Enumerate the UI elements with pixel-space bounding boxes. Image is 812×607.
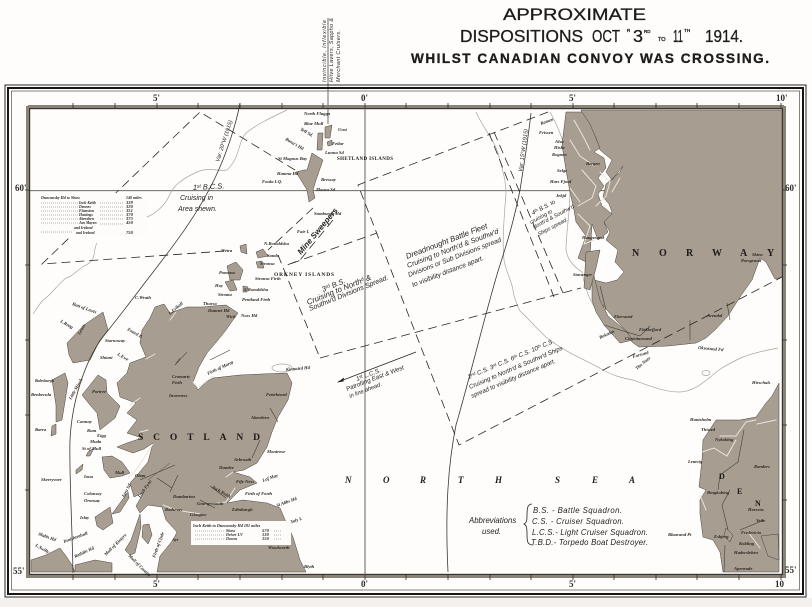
distance table: Duncansby Head: Duncansby Hd to Shaw [40,195,80,200]
place names: Shetland and Orkney: Fair I. [297,229,310,234]
place names: Scotland: Loch Fyne [136,479,153,499]
abbreviations legend: used. [482,527,501,536]
place names: Scotland: St Abbs Hd [276,496,298,508]
place names: Norway: Porsgrund [741,258,762,263]
place names: Norway: Bokadas [597,328,615,340]
title: OCT [592,26,620,46]
distance table: Inch Keith: Shaw [226,528,235,533]
place names: Shetland and Orkney: Hoy [214,283,224,288]
Lewis and Outer Hebrides [67,312,108,363]
degree labels [13,93,797,589]
place names: Scotland: Benbecula [30,392,52,397]
place names: Norway: Jekjd [555,193,567,198]
place names: Scotland: Little Minch [67,377,84,401]
place names: Scotland: Blyth [303,564,315,569]
land: Denmark [699,383,779,572]
depth contours [33,110,778,392]
patrol area: 3rd B.S.: 3 [320,284,328,294]
place names: Shetland and Orkney: Fetlar [332,141,344,146]
place names: Shetland and Orkney: Stronsa [260,261,275,266]
place names: Scotland [30,295,315,578]
place names: Shetland and Orkney: Bressay [320,177,337,182]
distance table: Duncansby Head: Jan Mayen [79,221,97,225]
Kintyre and Arran [125,514,141,555]
place names: Norway: Ekersund [613,314,633,319]
Mull [102,456,130,478]
degree labels: 55' [13,566,25,576]
map labels: countries and sea: N [344,475,352,485]
distance table: Duncansby Head: 750 [126,230,134,235]
patrol area: 3rd B.S. [278,255,390,358]
distance table: Duncansby Head: and Ireland [74,226,93,230]
patrol area: mine sweepers [268,206,377,265]
place names: Scotland: Firth [172,380,182,385]
place names: Scotland: Firth of Moray [206,359,235,376]
place names: Scotland: Malin Hd [37,531,57,543]
place names: Scotland: Islay [79,515,90,520]
place names: Scotland: Firth of Forth [245,491,273,496]
title: 1914. [705,26,743,46]
patrol area: 4th B.S.: B.S. to [537,199,557,214]
place names: Denmark: Ringkobing [707,490,730,495]
patrol: cruiser squadrons: th [536,343,542,349]
place names: Scotland: Lewis [76,323,86,336]
place names: Scotland: Fife Ness [236,479,254,484]
map labels: countries and sea: ORKNEY ISLANDS [274,272,334,278]
place names: Scotland: Montrose [266,449,285,454]
land: Scotland [31,304,306,572]
place names: Scotland: Cromarty [172,374,191,379]
place names: Scotland: Glasgow [190,512,207,517]
distance table: Duncansby Head [40,193,147,236]
place names: Denmark: Randers [754,464,770,469]
patrol: cruiser squadrons: th [513,353,518,359]
map labels: countries and sea: E [591,475,598,485]
degree labels: 5' [153,579,160,589]
patrol: cruiser squadrons: C.S. 10 [516,345,540,360]
place names: Shetland and Orkney: Lunna Sd [324,150,344,155]
degree labels: 5' [569,93,576,103]
map labels: countries and sea: O [383,475,390,485]
place names: Scotland: Mull of Kintyre [102,532,127,557]
patrol area: 4th B.S.: cruising to [529,209,554,226]
vertical annotation: outlying forces: Hiive Lavers, Sappho & [329,18,335,82]
place names: Scotland: Balesburgh [34,378,55,383]
place names: Scotland: Barra [34,427,47,432]
place names: Shetland and Orkney: Mousa Sd [315,187,336,192]
distance table: Duncansby Head: 370 [125,212,134,217]
abbreviations legend: B.S. - Battle Squadron. [533,506,622,515]
patrol area: Dreadnought Battle Fleet [320,112,782,445]
place names: Norway: Alsu [554,139,564,144]
place names: Shetland and Orkney: Noss Hd [240,313,258,318]
distance table: Duncansby Head: Hastings [78,213,93,217]
place names: Scotland: C.Wrath [135,295,151,300]
title: R [627,28,631,33]
patrol area: Dreadnought Battle Fleet: Divisions or Sub Divisions spread [407,237,503,279]
place names: Shetland and Orkney: Pomona [219,270,236,275]
place names: Shetland and Orkney: Wick [226,314,236,319]
place names: Scotland: Rothesay [165,507,183,512]
degree labels: 10 [775,579,784,589]
patrol: cruiser squadrons: C.S. 6 [495,355,516,369]
map labels: countries and sea: W [712,248,722,259]
patrol: 1st L.C.S. with arrow: in line ahead. [349,382,383,400]
patrol: 1st L.C.S. with arrow: 1 [355,375,361,383]
place names: Norway: Ramen [540,116,554,126]
patrol area: Dreadnought Battle Fleet: Dreadnought Battle Fleet [404,221,489,261]
Skye [82,375,120,430]
place names: Shetland and Orkney: North Flugga [303,111,331,116]
place names: Norway: Selge [557,168,567,173]
vertical annotation: outlying forces: Invincible, Inflexible [322,20,328,82]
place names: Scotland: Aberdeen [250,415,270,420]
patrol: cruiser squadrons: 2 [467,373,473,381]
place names: Denmark: Veile [756,518,765,523]
land: Shetland and Orkney [225,125,332,292]
abbreviations legend: C.S. - Cruiser Squadron. [532,517,624,526]
variation line 15 W: Var: 15°W (1915) [518,129,530,172]
place names: Denmark: Hantsholm [689,417,712,422]
variation line 20 W [70,103,240,573]
place names: Norway: Hiske [553,145,565,150]
patrol area: 3rd B.S.: Cruising to North [305,277,363,307]
place names: Shetland and Orkney: S.Ronaldsha [244,287,269,292]
place names: Shetland and Orkney: Sanda [267,253,280,258]
patrol area: 3rd B.S.: & [362,273,372,284]
map labels: countries and sea: R [686,248,694,259]
patrol area: 4th B.S.: Ships spread. [537,217,569,238]
place names: Scotland: Iona [83,474,94,479]
map labels: countries and sea: SCOTLAND [138,433,260,443]
title: 11 [673,26,683,46]
place names: Scotland: Dumbarton [172,494,195,499]
place names: Shetland and Orkney: Unst [338,127,348,132]
place names: Norway: The Naze [634,355,651,371]
place names: Scotland: Fetteheard [266,392,287,397]
place names: Shetland and Orkney: Dunnet Hd [207,308,230,313]
distance table: Inch Keith: 150 [262,536,270,541]
distance table: Inch Keith: 570 [262,528,270,533]
place names: Norway: Arendal [706,313,723,318]
title: DISPOSITIONS [460,26,583,46]
degree labels: 60' [785,183,797,193]
place names: Scotland: Oban [135,473,146,478]
place names: Scotland: Mull of Cantire [127,552,152,578]
place names: Norway: Forsund [632,350,650,359]
Islay and Jura [95,507,113,530]
place names: Shetland and Orkney: Yell Sd. [300,127,314,138]
place names: Shetland and Orkney: Pentland Firth [242,297,271,302]
patrol area: Dreadnought Battle Fleet: to visibility distance apart. [411,255,485,289]
place names: Norway: Rognen [552,152,567,157]
place names: Scotland: Eigg [96,433,107,438]
place names: Scotland: Portree [92,389,106,394]
place names: Denmark [667,380,771,571]
place names: Shetland and Orkney [203,111,348,319]
place names: Denmark: Fredericia [741,530,762,535]
distance table: Duncansby Head: Flamston [79,209,94,213]
distance table: Duncansby Head: 375 [125,216,134,221]
degree labels: 10' [776,93,788,103]
patrol: 1st L.C.S. with arrow: st [358,373,364,379]
place names: Shetland and Orkney: Blue Mull [303,121,324,126]
place names: Scotland: St of Mull [82,446,102,451]
abbreviations legend: T.B.D.- Torpedo Boat Destroyer. [531,538,648,547]
land: Norway [562,110,782,347]
map labels: countries and sea: S [555,475,560,485]
patrol area: 4th B.S.: th [533,207,539,213]
patrol: 1st L.C.S. with arrow [337,352,416,400]
place names: Norway [539,116,763,371]
map labels: countries and sea: D [719,472,725,481]
title: RD [644,29,651,34]
map labels: countries and sea: R [419,475,426,485]
place names: Scotland: Innishtrahull [62,530,89,544]
variation line 15 W [447,113,531,572]
patrol area: 1st B.C.S.: Area shewn. [177,206,217,213]
patrol: 1st L.C.S. with arrow: L.C.S. [362,367,382,380]
distance table: Duncansby Head: 351 [125,208,133,213]
map labels: countries and sea: H [494,475,503,485]
degree labels: 0' [361,579,368,589]
place names: Scotland: L.Roag [59,318,75,330]
map labels: countries and sea [138,157,775,508]
place names: Denmark: Horsens [747,507,764,512]
place names: Shetland and Orkney: Stronsa Firth [255,276,281,281]
place names: Shetland and Orkney: Hamna Hd [276,171,299,176]
place names: Scotland: Woodworth [268,545,290,550]
place names: Scotland: Firth of Clyde [151,531,165,558]
place names: Scotland: Muda [89,439,102,444]
vertical annotation: outlying forces: Merchant Cruisers. [336,30,342,82]
Ireland and Galloway [31,548,75,572]
place names: Scotland: Rum [87,428,97,433]
place names: Denmark: Kolding [738,541,755,546]
place names: Norway: Hars Fjord [549,179,572,184]
place names: Scotland: Enard B. [126,326,144,340]
place names: Scotland: Oronsay [84,498,101,503]
place names: Norway: Haugesund [581,235,605,240]
place names: Denmark: Blaavand Pt [667,532,692,537]
place names: Scotland: Ayr [171,537,179,542]
place names: Scotland: Inch Keith [211,484,232,499]
distance table: Inch Keith: Inch Keith to Duncansby Hd 181 miles [192,523,261,528]
patrol: cruiser squadrons: nd [470,371,477,377]
place names: Shetland and Orkney: Thurso [203,301,217,306]
place names: Norway: Skien [752,252,763,257]
title: TO [658,37,666,43]
place names: Scotland: Colonsay [84,491,103,496]
place names: Norway: Frissen [539,130,554,135]
place names: Norway: Christiansand [625,336,653,341]
degree labels: 0' [361,93,368,103]
place names: Scotland: Mull [114,470,125,475]
place names: Norway: Bergen [585,161,600,166]
abbreviations legend: Abbreviations [468,516,516,525]
patrol area: 4th B.S.: 4 [531,210,537,217]
patrol area: 4th B.S.: North'd & Southw'd [532,203,576,231]
patrol: cruiser squadrons: rd [492,362,498,368]
place names: Shetland and Orkney: Wetra [221,248,233,253]
map labels: countries and sea: N [632,248,640,259]
place names: Scotland: Grangemouth [197,501,224,506]
place names: Shetland and Orkney: St Magnus Bay [278,156,308,161]
patrol area: 3rd B.S.: d [360,276,365,283]
map labels: countries and sea: Y [767,248,775,259]
distance table: Inch Keith: Driver LV [225,532,243,537]
distance table: Inch Keith [191,521,291,545]
patrol area: 3rd B.S.: Southw'd Divisions Spread. [308,275,390,313]
patrol: cruiser squadrons: C.S. 3 [475,364,495,378]
place names: Scotland: I.of May [261,472,280,483]
place names: Denmark: Hirschals [751,380,771,385]
title: WHILST CANADIAN CONVOY WAS CROSSING. [411,51,769,66]
distance table: Duncansby Head: 339 [125,200,134,205]
place names: Scotland: Kinnaird Hd [285,365,311,372]
vertical annotation: outlying forces [322,18,342,124]
patrol area: mine sweepers: Mine Sweepers [296,206,340,256]
place names: Scotland: Cannay [77,419,93,424]
title: TH [684,28,690,33]
place names: Scotland: Edinburgh [231,507,253,512]
distance table: Duncansby Head: Dennes [78,205,91,209]
abbreviations legend: L.C.S.- Light Cruiser Squadron. [532,528,648,537]
place names: Scotland: L.Eriboll [167,300,184,316]
patrol area: 1st B.C.S.: B.C.S. [201,181,224,192]
degree labels: 55' [785,565,797,575]
place names: Norway: Oksosund Fd [698,345,724,352]
distance table: Duncansby Head: 320 [125,204,134,209]
place names: Scotland: Stornoway [105,338,126,343]
place names: Norway: Stavanger [573,272,592,277]
abbreviations legend [468,504,648,547]
patrol area: Dreadnought Battle Fleet: Cruising to North'd & Southw'd [405,226,501,270]
place names: Shetland and Orkney: Foula I.Q. [262,179,282,184]
place names: Shetland and Orkney: Sumburgh Hd [314,211,342,216]
patrol: cruiser squadrons: spread to visibility distance apart. [470,358,557,400]
place names: Scotland: Arbroath [233,457,252,462]
map labels: countries and sea: SHETLAND ISLANDS [337,157,393,162]
distance table: Duncansby Head: and Ireland [76,231,95,235]
patrol area: 3rd B.S.: B.S. [328,276,347,291]
place names: Denmark: Hadersleben [733,550,758,555]
title: 3 [633,26,643,46]
map labels: countries and sea: E [737,487,742,496]
place names: Denmark: Thisted [701,427,716,432]
place names: Denmark: Apenrade [733,566,752,571]
map labels: countries and sea: N [755,499,761,508]
patrol area: 3rd B.S.: rd [325,283,331,290]
place names: Scotland: Shiant [100,355,113,360]
place names: Scotland: Dundee [218,465,234,470]
patrol area: 4th B.S. [489,132,576,297]
patrol area: 1st B.C.S.: 1 [193,183,197,192]
patrol area: 1st B.C.S.: st [197,184,202,190]
place names: Denmark: Esbjerg [713,534,729,539]
degree labels: 60' [15,183,27,193]
place names: Scotland: Holy I. [288,516,303,525]
place names: Scotland: Butt of Lewis [71,301,97,315]
distance table: Duncansby Head: 140 miles [126,195,142,200]
patrol: cruiser squadrons: Cruising to North'd & Southw'd Ships [468,345,564,391]
place names: Scotland: Jura Sd [120,482,132,499]
place names: Scotland: Rathlin Hd [73,545,95,559]
degree labels: 5' [569,579,576,589]
title [411,5,769,66]
patrol area: 1st B.C.S.: Cruising in [180,195,213,202]
distance table: Inch Keith: 130 [262,532,270,537]
degree labels: 5' [153,93,160,103]
map labels: countries and sea: O [659,248,667,259]
title: APPROXIMATE [503,5,646,24]
variation line 20 W: Var: 20°W (1915) [215,120,234,163]
distance table: Duncansby Head: Aberdeen [78,217,94,221]
place names: Scotland: L.Ewe [116,351,130,362]
place names: Scotland: Inverness [168,393,188,398]
place names: Denmark: Nykobing [714,437,734,442]
distance table: Inch Keith: Downs [225,536,238,541]
patrol: cruiser squadrons: C.S. [540,338,555,350]
place names: Shetland and Orkney: N.Ronaldsha [263,241,290,246]
place names: Norway: Flekkefjord [639,327,662,332]
patrol: 1st L.C.S. with arrow: Patrolling East & West [345,364,405,393]
place names: Shetland and Orkney: Stroma [218,292,232,297]
patrol area: 1st B.C.S. [42,112,295,264]
place names: Scotland: Skerryvore [41,477,62,482]
map labels: countries and sea: T [458,475,464,485]
distance table: Duncansby Head: 450 [125,220,134,225]
map labels: countries and sea: A [628,475,635,485]
distance table: Duncansby Head: Inch Keith [78,201,96,205]
place names: Shetland and Orkney: Rona's Hd [284,137,305,151]
place names: Denmark: Lemvig [687,459,703,464]
place names: Scotland: L.Swilly [34,542,51,555]
map labels: countries and sea: A [740,248,748,259]
